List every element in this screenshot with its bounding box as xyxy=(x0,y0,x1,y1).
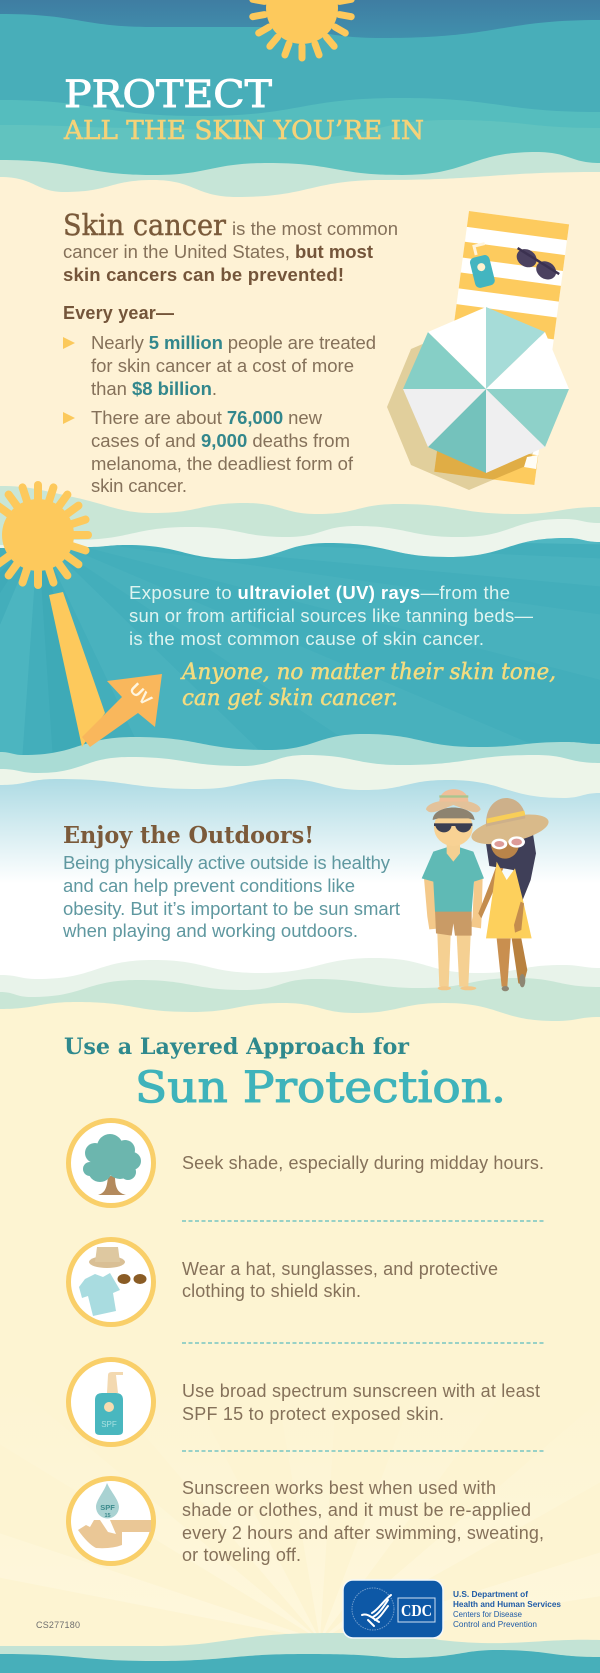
text: Wear a hat, sunglasses, and protective xyxy=(182,1259,498,1279)
text block: outdoors: when playing and working outdoors. xyxy=(62,920,358,941)
callout: anyone can get skin cancer: Anyone, no matter their skin tone, xyxy=(180,660,556,685)
text block: UV exposure: is the most common cause of skin cancer. xyxy=(129,628,484,649)
bullet 2 xyxy=(63,407,354,496)
panel: skin cancer intro xyxy=(63,208,398,285)
man xyxy=(422,789,484,990)
bullet 2: There are about 76,000 new xyxy=(91,407,323,428)
subtitle: all the skin you're in: ALL THE SKIN YOU’RE IN xyxy=(63,116,424,146)
heading: enjoy the outdoors: Enjoy the Outdoors! xyxy=(63,822,314,849)
panel: skin cancer intro: skin cancers can be prevented! xyxy=(63,264,344,285)
arrow: UV reflected: UV xyxy=(126,679,156,710)
bullet 2: skin cancer. xyxy=(91,475,187,496)
tip 2: hat sunglasses clothing: clothing to shield skin. xyxy=(182,1281,361,1301)
text block: UV exposure xyxy=(129,582,534,649)
icon: hat shirt sunglasses xyxy=(68,1240,154,1324)
text block: agency names: Centers for Disease xyxy=(453,1609,522,1619)
text: Seek shade, especially during midday hours. xyxy=(182,1153,544,1173)
bullet 2: cases of and 9,000 deaths from xyxy=(91,430,350,451)
towel white stripe patch xyxy=(524,455,538,469)
illustration: couple in hats xyxy=(422,789,551,991)
tip 4: reapply sunscreen: or toweling off. xyxy=(182,1545,301,1565)
text block: agency names xyxy=(453,1589,561,1629)
icon: HHS eagle xyxy=(362,1595,391,1626)
icon: sunscreen drop on hand: SPF xyxy=(100,1503,115,1512)
icon: sunscreen pump: SPF xyxy=(101,1420,117,1429)
towel xyxy=(434,211,569,485)
lower waves and sky gradient xyxy=(0,734,600,1673)
text block: agency names: Control and Prevention xyxy=(453,1619,537,1629)
text block: outdoors: obesity. But it’s important to be sun smart xyxy=(63,898,400,919)
heading: sun protection: Sun Protection. xyxy=(135,1063,506,1113)
tip 4: reapply sunscreen: shade or clothes, and it must be re-applied xyxy=(182,1500,531,1520)
heading: every year: Every year— xyxy=(63,303,174,323)
arrow: UV ray beam xyxy=(49,592,105,747)
divider xyxy=(182,1342,546,1344)
icon: sunscreen drop on hand xyxy=(68,1478,154,1564)
bullet 1 xyxy=(63,332,376,399)
callout: anyone can get skin cancer xyxy=(180,660,556,711)
text: Sunscreen works best when used with xyxy=(182,1478,496,1498)
panel: skin cancer intro: cancer in the United States, but most xyxy=(63,241,373,262)
background: cream sand xyxy=(0,0,600,1040)
bullet list: statistics xyxy=(63,332,376,496)
heading: use a layered approach: Use a Layered Approach for xyxy=(64,1034,409,1060)
icon: sunscreen drop on hand: 15 xyxy=(104,1513,111,1519)
tip 3: sunscreen: SPF 15 to protect exposed skin. xyxy=(182,1404,444,1424)
logo: CDC xyxy=(343,1580,443,1638)
panel: ultraviolet ocean band xyxy=(0,538,600,755)
sun rays xyxy=(0,538,600,755)
icon: top sun xyxy=(253,0,351,58)
text block: outdoors: Being physically active outside is healthy xyxy=(63,852,391,873)
bullet 1: Nearly 5 million people are treated xyxy=(91,332,376,353)
tip 2: hat sunglasses clothing xyxy=(68,1240,498,1324)
divider xyxy=(182,1450,546,1452)
title: Protect: PROTECT xyxy=(64,73,272,116)
arrow: UV reflected xyxy=(82,674,162,747)
icon: sunscreen bottle xyxy=(466,243,496,289)
bullet 1: for skin cancer at a cost of more xyxy=(91,355,354,376)
divider xyxy=(182,1220,546,1222)
text block: agency names: Health and Human Services xyxy=(453,1599,561,1609)
callout: anyone can get skin cancer: can get skin cancer. xyxy=(182,686,398,711)
bottom waves xyxy=(0,1633,600,1673)
tip 4: reapply sunscreen xyxy=(68,1478,544,1565)
umbrella xyxy=(403,307,569,473)
bullet 2: melanoma, the deadliest form of xyxy=(91,453,354,474)
tip 3: sunscreen xyxy=(68,1360,540,1444)
woman xyxy=(469,798,551,991)
panel: skin cancer intro: is the most common xyxy=(232,218,398,239)
text block: UV exposure: sun or from artificial sources like tanning beds— xyxy=(129,605,534,626)
icon: lower sun xyxy=(0,485,88,585)
text block: outdoors: and can help prevent conditions like xyxy=(63,875,355,896)
mid section waves: sand to ocean xyxy=(0,486,600,800)
text block: agency names: U.S. Department of xyxy=(453,1589,528,1599)
logo: CDC: CDC xyxy=(401,1601,432,1620)
icon: sunscreen pump xyxy=(68,1360,154,1444)
tip 4: reapply sunscreen: every 2 hours and after swimming, sweating, xyxy=(182,1523,544,1543)
panel: skin cancer intro: Skin cancer xyxy=(63,208,226,242)
icon: sunglasses xyxy=(511,244,562,284)
text: Use broad spectrum sunscreen with at least xyxy=(182,1381,540,1401)
background rays: bottom glow xyxy=(0,1340,600,1640)
text block: outdoors xyxy=(62,852,400,941)
bullet 1: than $8 billion. xyxy=(91,378,217,399)
text block: UV exposure: Exposure to ultraviolet (UV) rays—from the xyxy=(129,582,510,603)
header ocean waves xyxy=(0,0,600,197)
tip 1: seek shade xyxy=(68,1120,544,1206)
umbrella shadow xyxy=(387,324,552,490)
code: publication number: CS277180 xyxy=(36,1620,80,1630)
icon: tree xyxy=(68,1120,154,1206)
illustration: beach towel and umbrella xyxy=(387,211,569,490)
